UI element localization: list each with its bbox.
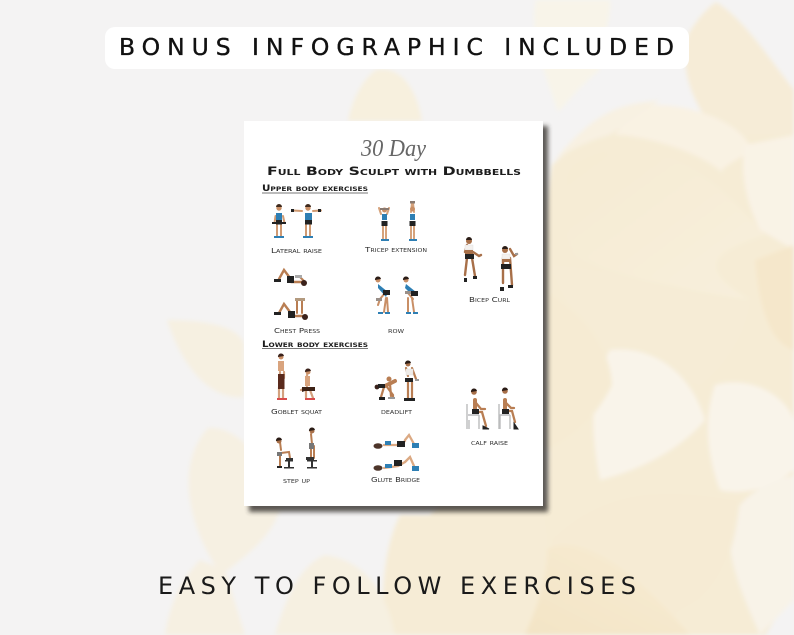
petal: bottom right (729, 475, 794, 635)
caption: easy to follow: EASY TO FOLLOW EXERCISES (158, 572, 636, 600)
label: deadlift: deadlift (381, 408, 413, 416)
label: tricep extension: Tricep extension (364, 246, 427, 254)
label: step up: step up (283, 477, 310, 485)
petal mass: right side (395, 113, 794, 635)
petal: bottom centre (383, 515, 547, 635)
petal: right middle (755, 245, 794, 350)
banner: bonus infographic: BONUS INFOGRAPHIC INCLUDED (119, 33, 674, 61)
petal: left (167, 320, 244, 397)
panel: exercise sheet (244, 121, 543, 506)
petal: centre right large (561, 148, 765, 300)
heading: full body sculpt: Full Body Sculpt with Dumbbells (267, 164, 521, 178)
exercise: lateral raise (272, 204, 321, 238)
exercise: chest press (274, 270, 308, 320)
exercise: bicep curl (464, 237, 518, 291)
exercise: tricep extension (379, 201, 417, 241)
exercise: calf raise (467, 387, 518, 429)
page shadow (249, 126, 548, 512)
heading: lower body: Lower body exercises (262, 339, 368, 349)
exercise: step up (276, 427, 317, 468)
petal: lower left tail (165, 560, 245, 635)
petal: upper wide (555, 100, 660, 160)
label: lateral raise: Lateral raise (271, 247, 322, 255)
title: 30 Day: 30 Day (360, 136, 426, 162)
banner: bonus infographic (105, 27, 689, 69)
petal: low centre (550, 492, 740, 635)
petal: top left small (348, 69, 422, 121)
petal: top right (685, 2, 794, 138)
label: goblet squat: Goblet squat (271, 408, 323, 416)
petal: upper mid (615, 105, 752, 175)
petal: lower right (708, 382, 794, 492)
heading: upper body: Upper body exercises (262, 183, 368, 193)
exercise: deadlift (375, 360, 419, 401)
label: chest press: Chest Press (274, 327, 320, 335)
petal: top centre (534, 0, 610, 112)
petal: bottom mid (275, 555, 395, 635)
label: row: row (388, 327, 404, 335)
exercise: glute bridge (374, 435, 419, 471)
petal: lower deep (516, 545, 690, 635)
petal: mid shade (550, 265, 750, 385)
petal: lower left (189, 428, 280, 575)
exercise: row (375, 276, 418, 314)
petal: right upper (743, 135, 794, 250)
label: bicep curl: Bicep Curl (469, 296, 510, 304)
label: calf raise: calf raise (471, 439, 508, 447)
exercise: goblet squat (277, 353, 315, 400)
petal: beside page (546, 290, 612, 450)
cream petals (165, 0, 794, 635)
petal: white centre (593, 349, 705, 480)
label: glute bridge: Glute Bridge (371, 476, 420, 484)
sheet contents (262, 136, 521, 485)
